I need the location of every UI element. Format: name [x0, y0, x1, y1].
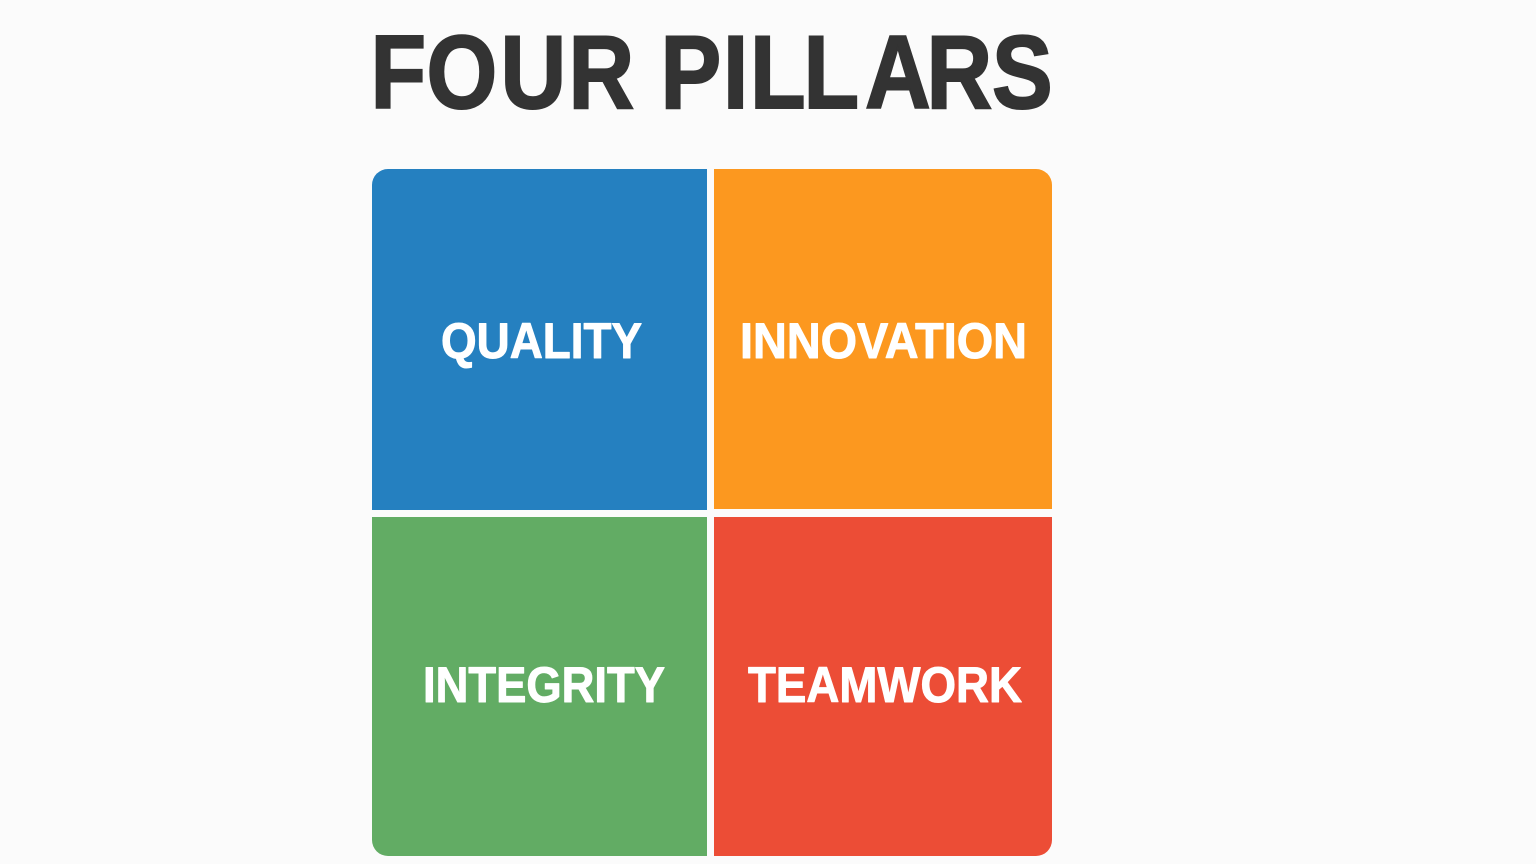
panel: innovation [714, 169, 1052, 509]
panel: teamwork: TEAMWORK [748, 657, 1022, 713]
panel: quality [372, 169, 707, 510]
title: FOUR PILLARS [370, 14, 1053, 130]
panel: integrity: INTEGRITY [423, 657, 665, 713]
panel: teamwork [714, 517, 1052, 856]
panel: quality: QUALITY [441, 313, 642, 369]
panel: innovation: INNOVATION [740, 313, 1027, 369]
panel: integrity [372, 517, 707, 856]
